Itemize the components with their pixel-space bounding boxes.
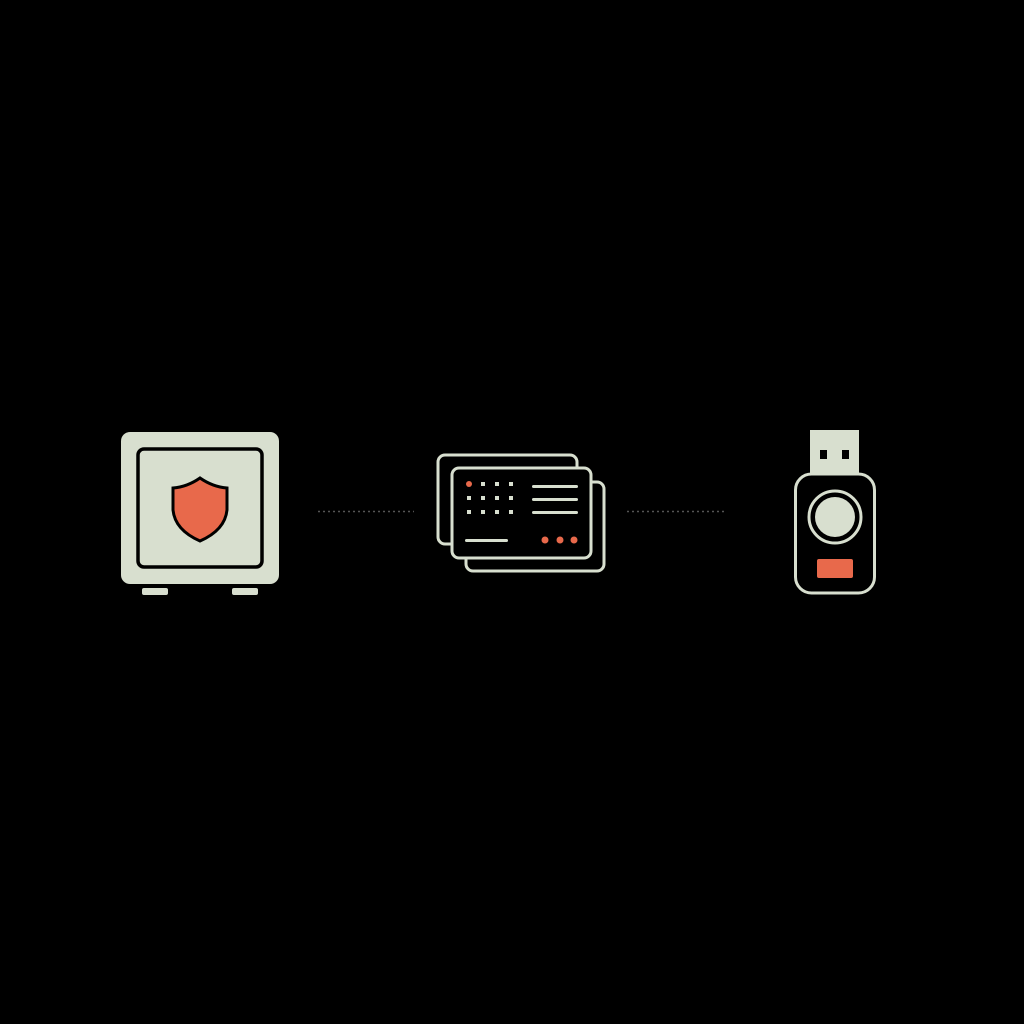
icon: USB security key bbox=[796, 430, 874, 593]
icon: safe with shield bbox=[121, 432, 279, 595]
dotted connector left bbox=[318, 510, 414, 512]
icon: stacked cards bbox=[438, 455, 604, 571]
dotted connector right bbox=[627, 510, 725, 512]
